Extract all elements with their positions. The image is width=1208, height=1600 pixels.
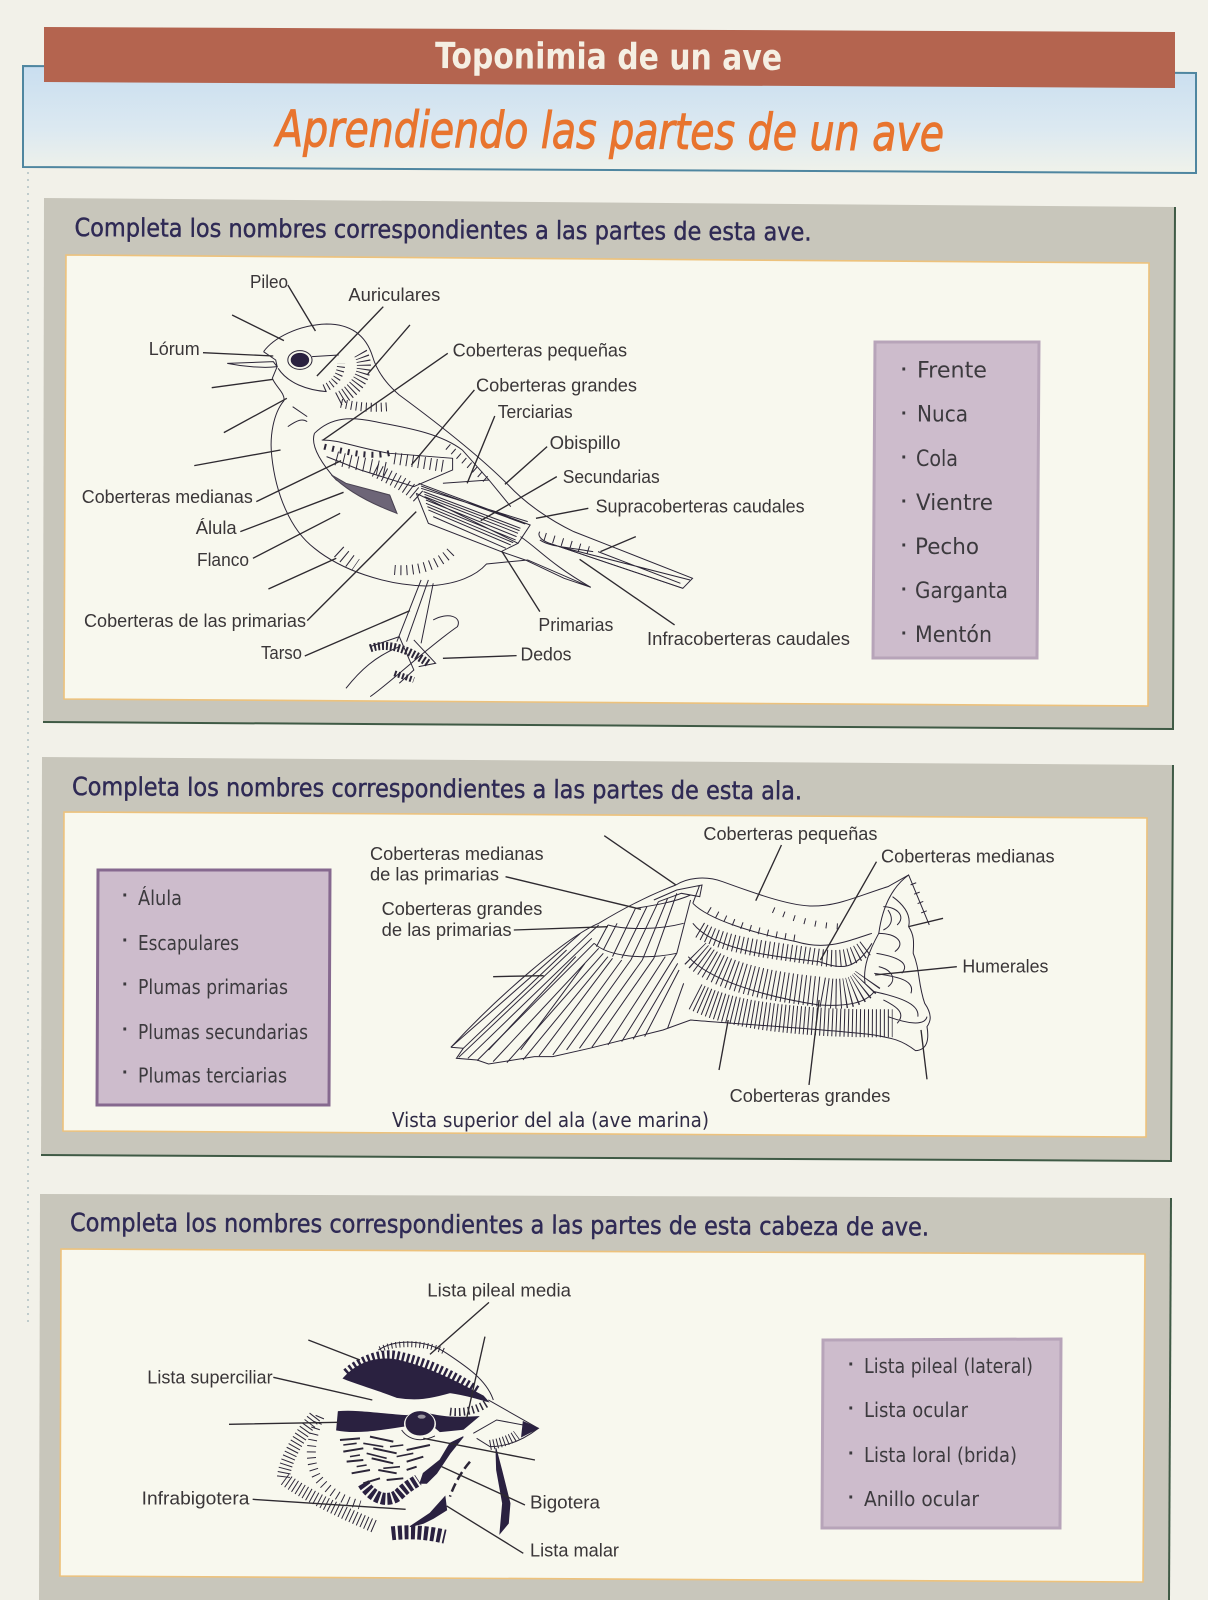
label: Coberteras grandes <box>730 1085 890 1106</box>
illustration: wing with leader lines <box>451 836 957 1085</box>
labels: bird <box>82 271 850 665</box>
list items: · <box>901 359 908 381</box>
label: Infracoberteras caudales <box>647 628 850 649</box>
header: blue title panel <box>23 66 1196 173</box>
word list: bird: Vientre <box>916 491 993 516</box>
word list: bird: · <box>901 535 908 557</box>
word list: bird: · <box>901 491 908 513</box>
label: Pileo <box>250 271 288 292</box>
word list: bird: · <box>901 447 908 469</box>
label: Flanco <box>197 549 249 570</box>
label: de las primarias <box>370 864 499 885</box>
label: Coberteras medianas <box>82 486 253 507</box>
word list: head: Lista pileal (lateral) <box>864 1354 1033 1378</box>
main title: Aprendiendo las partes de un ave <box>274 100 944 163</box>
caption: wing view: Vista superior del ala (ave marina) <box>392 1108 709 1132</box>
heading: head: Completa los nombres correspondientes a las partes de esta cabeza de ave. <box>70 1208 929 1241</box>
word list: bird: Garganta <box>915 579 1008 604</box>
word list: head: Lista ocular <box>864 1398 969 1422</box>
word list: head: · <box>848 1398 855 1420</box>
word list: bird: Pecho <box>915 535 979 560</box>
list items: · <box>848 1354 855 1376</box>
list items: · <box>122 885 129 907</box>
label: Coberteras grandes <box>382 898 542 919</box>
word list: head: · <box>848 1487 855 1509</box>
word list: head: Anillo ocular <box>864 1487 980 1511</box>
label: Supracoberteras caudales <box>596 496 805 517</box>
label: de las primarias <box>382 919 512 940</box>
word list: wing <box>97 870 330 1105</box>
word list: wing: Álula <box>138 886 182 910</box>
panel: parts of the head <box>39 1194 1171 1600</box>
word list: wing: Plumas primarias <box>138 975 288 999</box>
label: Lista superciliar <box>147 1366 273 1387</box>
word list: bird: Nuca <box>917 402 968 428</box>
heading: wing: Completa los nombres correspondientes a las partes de esta ala. <box>72 772 802 805</box>
labels: head <box>142 1280 619 1561</box>
word list: bird: · <box>901 579 908 601</box>
label: Secundarias <box>563 466 660 487</box>
banner title: Toponimia de un ave <box>435 36 782 79</box>
label: Lista malar <box>530 1540 619 1561</box>
word list: bird: · <box>901 403 908 425</box>
label: Terciarias <box>498 401 573 422</box>
labels: wing <box>370 823 1055 1106</box>
heading: bird: Completa los nombres correspondientes a las partes de esta ave. <box>74 213 812 247</box>
label: Tarso <box>261 642 302 663</box>
label: Obispillo <box>550 432 621 453</box>
word list: head: Lista loral (brida) <box>864 1443 1017 1467</box>
label: Coberteras grandes <box>476 375 637 396</box>
word list: wing: Escapulares <box>138 931 239 955</box>
label: Humerales <box>962 955 1048 976</box>
panel: parts of the bird <box>43 198 1175 729</box>
label: Coberteras pequeñas <box>703 823 877 844</box>
word list: bird: Mentón <box>915 623 992 648</box>
label: Álula <box>196 517 237 538</box>
word list: wing: · <box>122 930 129 952</box>
word list: wing: · <box>122 1062 129 1084</box>
label: Coberteras medianas <box>881 846 1055 867</box>
label: Coberteras de las primarias <box>84 610 306 631</box>
word list: bird <box>873 342 1039 658</box>
word list: bird: Frente <box>917 358 987 384</box>
label: Coberteras pequeñas <box>453 340 627 361</box>
label: Infrabigotera <box>142 1487 250 1508</box>
label: Coberteras medianas <box>370 843 544 864</box>
illustration: bird with leader lines <box>194 285 693 697</box>
word list: head <box>822 1339 1061 1528</box>
label: Auriculares <box>348 284 440 305</box>
label: Lista pileal media <box>427 1280 572 1301</box>
word list: bird: Cola <box>916 447 958 472</box>
illustration: bird head with leader lines <box>229 1302 538 1553</box>
header: red banner <box>44 27 1175 88</box>
word list: wing: Plumas terciarias <box>138 1064 287 1088</box>
panel: parts of the wing <box>41 757 1173 1161</box>
label: Dedos <box>520 644 572 665</box>
word list: wing: · <box>122 1019 129 1041</box>
word list: wing: · <box>122 974 129 996</box>
label: Primarias <box>538 614 613 635</box>
label: Lórum <box>149 338 200 359</box>
word list: bird: · <box>901 623 908 645</box>
word list: head: · <box>848 1443 855 1465</box>
word list: wing: Plumas secundarias <box>138 1020 308 1044</box>
label: Bigotera <box>530 1491 601 1512</box>
